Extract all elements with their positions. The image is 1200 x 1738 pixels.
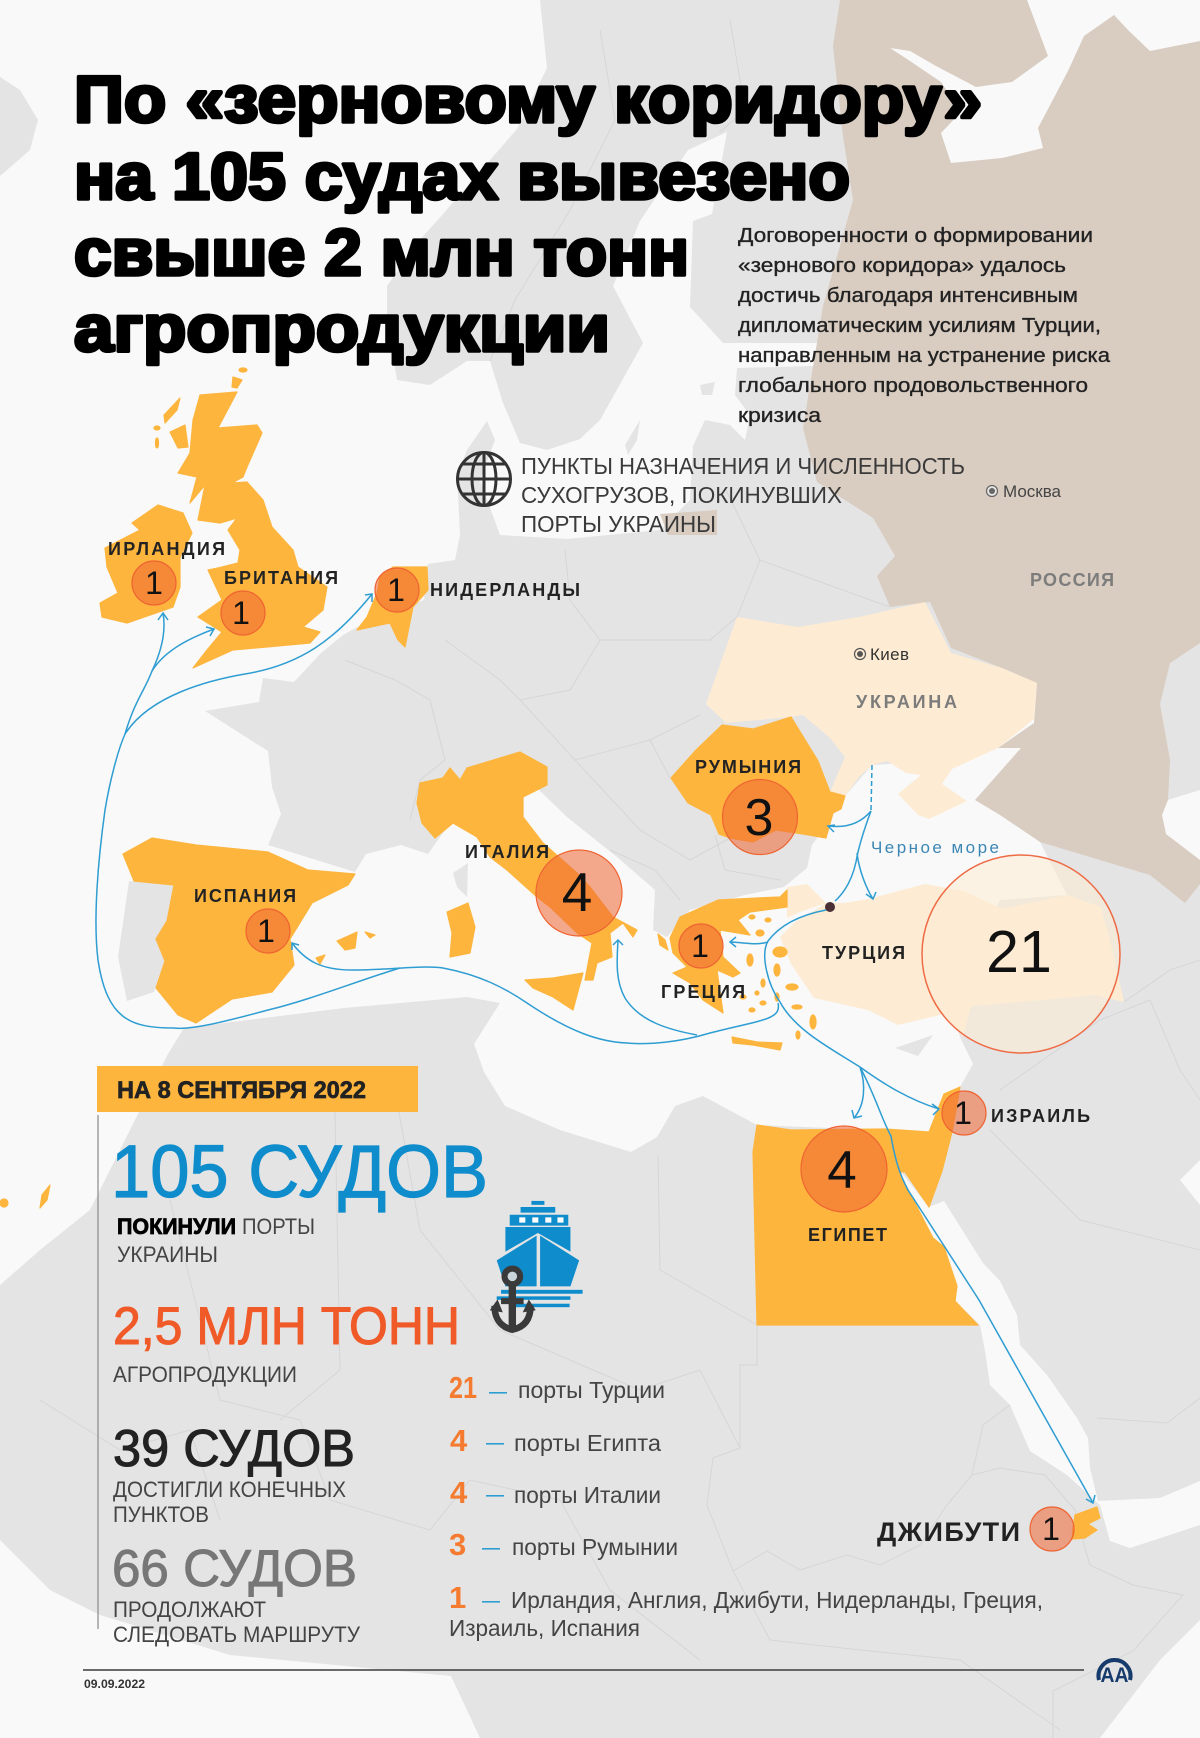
port counts list: 4 [450,1423,468,1458]
stat: 105 vessels: УКРАИНЫ [117,1242,218,1267]
port counts list: порты Италии [514,1482,661,1508]
country labels: ИЗРАИЛЬ [991,1106,1090,1126]
intro paragraph: направленным на устранение риска [738,345,1111,367]
bubble: Egypt 4: 4 [827,1141,857,1200]
country labels: РУМЫНИЯ [695,757,801,777]
title: свыше 2 млн тонн [74,215,689,289]
bubble: Djibouti 1: 1 [1042,1511,1060,1547]
country: Djibouti [1072,1507,1100,1539]
bubble: Ireland 1 [132,561,176,605]
title: По «зерновому коридору» [74,62,982,136]
bubble: Romania 3: 3 [745,789,773,847]
country labels: ДЖИБУТИ [877,1517,1020,1547]
map subtitle: ПОРТЫ УКРАИНЫ [521,511,716,537]
country: United Kingdom [154,368,327,668]
bubble: Spain 1: 1 [257,913,275,949]
bubble: Spain 1 [246,909,290,953]
intro paragraph: «зернового коридора» удалось [738,255,1066,277]
stat: 105 vessels: ПОРТЫ [242,1214,315,1239]
bubble: Israel 1 [942,1091,986,1135]
country labels: ИСПАНИЯ [194,886,296,906]
map subtitle: СУХОГРУЗОВ, ПОКИНУВШИХ [521,482,842,508]
bubble: Italy 4 [536,850,622,936]
country: Ireland [100,505,192,623]
country: Egypt and Israel [753,1087,978,1325]
map subtitle [521,453,965,537]
port counts list: порты Румынии [512,1534,678,1560]
country labels: ИТАЛИЯ [465,842,549,862]
port counts list: 21 [449,1370,477,1405]
stat: 2.5 million tons: 2,5 МЛН ТОНН [113,1297,460,1356]
port counts list: 3 [449,1527,466,1562]
stat: 2.5 million tons: АГРОПРОДУКЦИИ [113,1362,297,1387]
port counts list: порты Турции [518,1377,665,1403]
date banner [97,1066,418,1112]
title: агропродукции [74,291,610,365]
map subtitle: ПУНКТЫ НАЗНАЧЕНИЯ И ЧИСЛЕННОСТЬ [521,453,965,479]
stat: 66 vessels: СЛЕДОВАТЬ МАРШРУТУ [113,1622,361,1647]
bubble: Romania 3 [722,780,798,854]
date banner: НА 8 СЕНТЯБРЯ 2022 [117,1077,366,1104]
bubble: Turkey 21: 21 [986,919,1052,985]
country labels: ИРЛАНДИЯ [108,539,225,559]
bubble: Britain 1: 1 [232,595,250,631]
country: Ukraine [706,602,1037,819]
stat: 39 vessels: ПУНКТОВ [113,1502,209,1527]
bubble: Djibouti 1 [1030,1507,1074,1551]
port counts list: Израиль, Испания [449,1615,640,1641]
country labels: НИДЕРЛАНДЫ [430,580,580,600]
shipping routes with arrows [96,594,1095,1503]
port counts list: порты Египта [514,1430,661,1456]
port counts list: Ирландия, Англия, Джибути, Нидерланды, Греция, [511,1587,1043,1613]
stat: 39 vessels [113,1420,355,1527]
country: Italy [417,752,637,1010]
intro paragraph: глобального продовольственного [738,375,1088,397]
intro paragraph: Договоренности о формировании [738,225,1093,247]
intro paragraph: достичь благодаря интенсивным [738,285,1078,307]
stat: 39 vessels: ДОСТИГЛИ КОНЕЧНЫХ [113,1477,346,1502]
departure point marker [825,902,835,912]
port counts list: 1 [449,1580,466,1615]
icon: globe [458,452,510,506]
bubble: Greece 1 [679,924,723,968]
stats panel rule [97,1115,99,1629]
country labels [108,539,1114,1547]
stat: 2.5 million tons [113,1297,460,1387]
bubble: Netherlands 1: 1 [387,572,405,608]
port counts list [449,1370,1043,1641]
intro paragraph: кризиса [738,405,822,427]
stat: 66 vessels: 66 СУДОВ [112,1540,357,1598]
footer rule [83,1669,1084,1671]
country labels: РОССИЯ [1030,570,1114,590]
bubble: Greece 1: 1 [691,928,709,964]
country labels: ТУРЦИЯ [822,943,905,963]
bubble: Netherlands 1 [375,568,419,612]
city label: Kyiv: Киев [870,645,909,664]
footer date: 09.09.2022 [84,1677,145,1691]
bubble: Turkey 21 [922,855,1120,1053]
port counts list: 4 [450,1475,468,1510]
stat: 66 vessels: ПРОДОЛЖАЮТ [113,1597,266,1622]
bubble: Egypt 4 [801,1126,887,1212]
stat: 105 vessels: 105 СУДОВ [111,1130,488,1213]
stat: 105 vessels: ПОКИНУЛИ [117,1214,236,1239]
country labels: ГРЕЦИЯ [661,982,745,1002]
country: Romania [671,717,845,842]
stat: 66 vessels [112,1540,361,1647]
country labels: ЕГИПЕТ [808,1225,887,1245]
stat: 39 vessels: 39 СУДОВ [113,1420,355,1478]
country: Turkey [780,884,1124,1037]
logo: Anadolu Agency: AA [1100,1664,1128,1687]
bubble: Ireland 1: 1 [145,565,163,601]
bubble: Britain 1 [221,591,265,635]
country labels: УКРАИНА [856,692,957,712]
city label: Moscow: Москва [1003,482,1062,501]
stat: 105 vessels [111,1130,488,1267]
intro paragraph: дипломатическим усилиям Турции, [738,315,1101,337]
title [74,62,982,365]
title: на 105 судах вывезено [74,139,850,213]
sea label: Black Sea: Черное море [871,838,999,857]
bubble: Italy 4: 4 [562,861,592,923]
country labels: БРИТАНИЯ [224,568,338,588]
country: Spain [0,838,375,1208]
country: Russia [660,0,1200,903]
icon: ship and anchor [490,1201,583,1330]
country: Greece [658,890,816,1050]
intro paragraph [738,225,1111,427]
country: Netherlands [357,567,428,647]
bubble: Israel 1: 1 [954,1095,972,1131]
